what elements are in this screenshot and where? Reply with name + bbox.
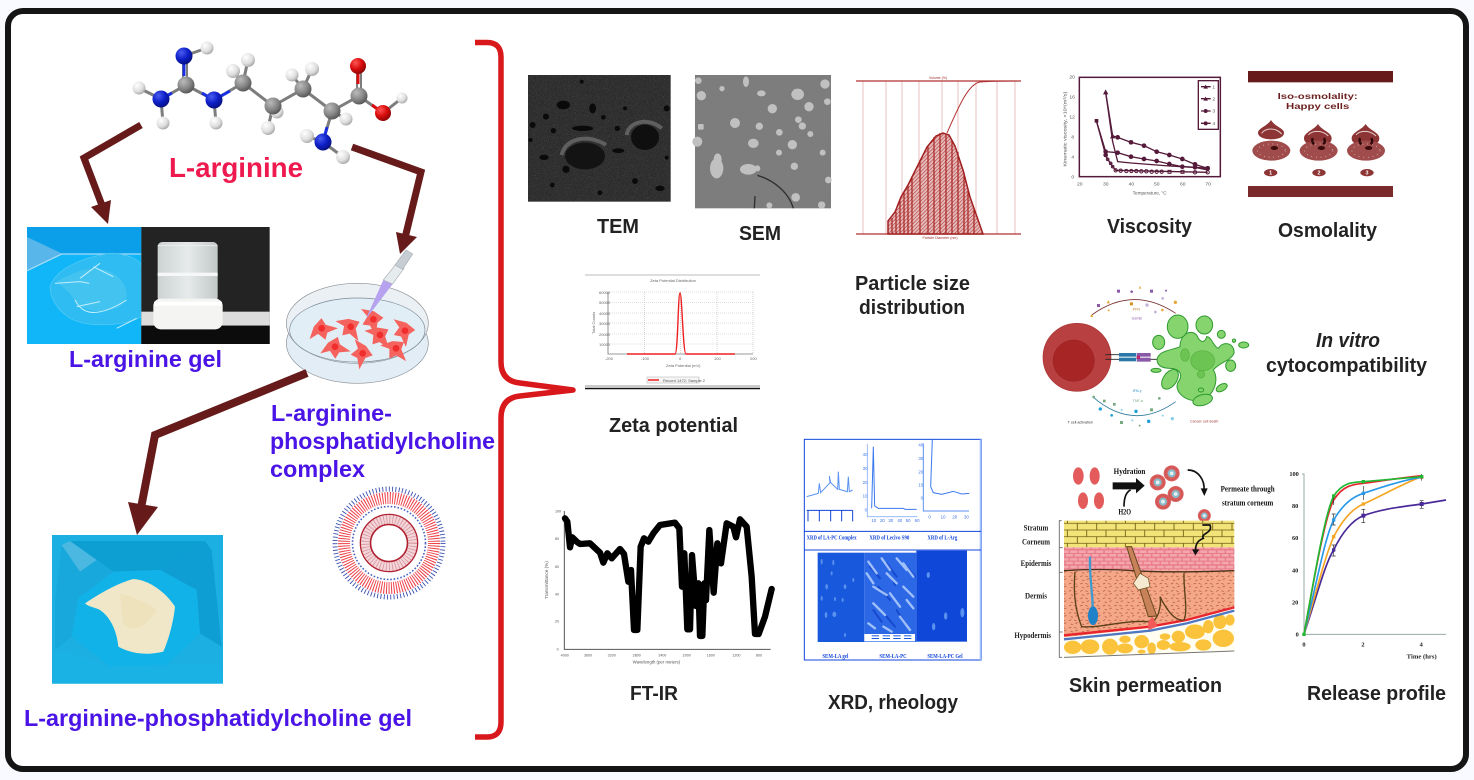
- panel: XRD and rheology blue composite: 0: [921, 495, 924, 500]
- panel: XRD and rheology blue composite: 60: [915, 518, 920, 523]
- label: XRD, rheology: XRD, rheology: [828, 692, 959, 714]
- icon: liposome: [335, 489, 443, 597]
- chart: release profile: Time (hrs): [1407, 653, 1437, 660]
- arrow: dish to complex gel: [128, 373, 307, 535]
- chart: FT-IR spectrum: 2800: [633, 654, 641, 658]
- chart: zeta potential: 10000: [599, 342, 611, 347]
- chart: viscosity: 1: [1212, 84, 1215, 90]
- chart: viscosity: Temperature, °C: [1133, 191, 1167, 196]
- panel: XRD and rheology blue composite: 0: [865, 507, 868, 512]
- chart: zeta potential: -200: [605, 356, 614, 361]
- chart: viscosity: 16: [1069, 95, 1075, 101]
- chart: release profile: 40: [1292, 567, 1298, 574]
- chart: FT-IR spectrum: 80: [555, 537, 559, 541]
- chart: viscosity: 4: [1212, 121, 1215, 127]
- chart: viscosity: 20: [1069, 75, 1075, 81]
- panel: XRD and rheology blue composite: 20: [863, 480, 868, 485]
- chart: viscosity: 60: [1180, 181, 1186, 187]
- chart: release profile: 4: [1420, 642, 1424, 649]
- illustration: in vitro cytocompatibility: Cancer cell death: [1190, 420, 1218, 424]
- panel: XRD and rheology blue composite: 10: [871, 518, 877, 523]
- illustration: skin permeation: Permeate through: [1221, 483, 1275, 493]
- panel: XRD and rheology blue composite: 10: [863, 493, 868, 498]
- illustration: skin permeation: Dermis: [1025, 590, 1048, 600]
- arrow: molecule to dish: [352, 147, 421, 254]
- chart: zeta potential: 20000: [599, 332, 611, 337]
- chart: viscosity: 30: [1103, 181, 1109, 187]
- panel: XRD and rheology blue composite: 10: [918, 483, 924, 488]
- label: In vitro cytocompatibility: [1266, 330, 1428, 377]
- image: osmolality panel: 2: [1318, 171, 1321, 177]
- label: FT-IR: FT-IR: [630, 683, 679, 705]
- chart: FT-IR spectrum: 1200: [732, 654, 740, 658]
- illustration: skin permeation: Hypodermis: [1014, 630, 1052, 640]
- chart: zeta potential: -100: [641, 356, 650, 361]
- illustration: skin permeation: Epidermis: [1021, 558, 1052, 568]
- chart: viscosity: 8: [1071, 134, 1074, 140]
- illustration: skin permeation: stratum corneum: [1222, 497, 1274, 507]
- panel: XRD and rheology blue composite: 30: [888, 518, 894, 523]
- chart: FT-IR spectrum: 60: [555, 565, 559, 569]
- illustration: in vitro cytocompatibility: IFN-γ: [1133, 389, 1142, 393]
- chart: zeta potential: 40000: [599, 311, 611, 316]
- chart: viscosity: 12: [1069, 115, 1075, 121]
- label: SEM: SEM: [739, 223, 781, 245]
- image: osmolality panel: [1248, 71, 1393, 197]
- chart: release profile: 80: [1292, 503, 1298, 510]
- panel: XRD and rheology blue composite: XRD of Lecivo S90: [869, 534, 909, 541]
- label: TEM: TEM: [597, 216, 639, 238]
- illustration: skin permeation: Hydration: [1114, 466, 1145, 476]
- panel: XRD and rheology blue composite: 40: [863, 452, 868, 457]
- image: TEM micrograph: [528, 75, 671, 202]
- label: Osmolality: Osmolality: [1278, 220, 1378, 242]
- bracket: red brace pointing to characterization: [475, 42, 573, 737]
- chart: release profile: 0: [1302, 642, 1306, 649]
- label: In vitro cytocompatibility: In vitro: [1316, 330, 1380, 352]
- chart: viscosity: 3: [1212, 109, 1215, 115]
- photo: L-arginine gel: [27, 227, 270, 344]
- image: osmolality panel: 1: [1269, 171, 1272, 177]
- chart: zeta potential: Zeta Potential Distribution: [650, 278, 696, 283]
- panel: XRD and rheology blue composite: 40: [918, 443, 924, 448]
- chart: zeta potential: 200: [750, 356, 757, 361]
- panel: XRD and rheology blue composite: XRD of LA-PC Complex: [807, 534, 857, 541]
- label: Viscosity: Viscosity: [1107, 216, 1193, 238]
- label: In vitro cytocompatibility: cytocompatibility: [1266, 355, 1428, 377]
- chart: particle size distribution: Particle Diameter (nm): [922, 236, 958, 240]
- chart: FT-IR spectrum: 0: [557, 648, 559, 652]
- panel: XRD and rheology blue composite: 30: [964, 515, 969, 520]
- chart: FT-IR spectrum: Transmittance (%): [544, 561, 549, 599]
- label: L-arginine-phosphatidylcholine gel: L-arginine-phosphatidylcholine gel: [24, 705, 412, 731]
- panel: XRD and rheology blue composite: XRD of L-Arg: [927, 534, 958, 541]
- illustration: in vitro cytocompatibility: PFN: [1133, 308, 1140, 312]
- chart: viscosity: 2: [1212, 96, 1215, 102]
- illustration: in vitro cytocompatibility: T cell activation: [1068, 421, 1093, 425]
- chart: viscosity: 70: [1205, 181, 1211, 187]
- illustration: in vitro cytocompatibility: TNF-α: [1133, 399, 1144, 403]
- panel: XRD and rheology blue composite: SEM-LA gel: [822, 653, 849, 660]
- label: L-arginine-phosphatidylcholine complex: phosphatidylcholine: [270, 428, 495, 454]
- label: Release profile: Release profile: [1307, 683, 1446, 705]
- chart: zeta potential: Zeta Potential (mV): [666, 363, 701, 368]
- chart: zeta potential: 0: [679, 356, 682, 361]
- chart: FT-IR spectrum: [544, 510, 772, 664]
- title: L-arginine: L-arginine: [169, 152, 303, 183]
- chart: viscosity: 0: [1071, 174, 1074, 180]
- illustration: skin permeation: Stratum: [1024, 523, 1049, 533]
- image: SEM micrograph: [692, 75, 832, 209]
- chart: particle size distribution: [856, 76, 1021, 240]
- label: Zeta potential: Zeta potential: [609, 415, 738, 437]
- illustration: skin permeation: Corneum: [1022, 537, 1051, 547]
- chart: zeta potential: 30000: [599, 321, 611, 326]
- label: Particle size distribution: distribution: [859, 297, 965, 319]
- chart: release profile: 0: [1296, 632, 1299, 639]
- photo: L-arginine-phosphatidylcholine gel: [52, 535, 223, 684]
- chart: zeta potential: Record 1472: Sample 2: [663, 378, 706, 383]
- panel: XRD and rheology blue composite: [804, 439, 981, 660]
- label: L-arginine gel: L-arginine gel: [69, 346, 222, 372]
- label: Particle size distribution: Particle size: [855, 273, 970, 295]
- chart: FT-IR spectrum: 4000: [561, 654, 569, 658]
- chart: release profile: 100: [1289, 471, 1299, 478]
- chart: FT-IR spectrum: 1600: [707, 654, 715, 658]
- image: osmolality panel: 3: [1366, 171, 1369, 177]
- arrow: molecule to L-arginine gel: [84, 125, 141, 224]
- illustration: skin permeation: [1014, 465, 1275, 657]
- image: osmolality panel: Happy cells: [1286, 102, 1350, 111]
- chart: viscosity: [1063, 75, 1220, 196]
- chart: viscosity: 40: [1129, 181, 1134, 187]
- label: L-arginine-phosphatidylcholine complex: complex: [270, 456, 365, 482]
- panel: XRD and rheology blue composite: 30: [863, 466, 868, 471]
- chart: release profile: 20: [1292, 600, 1298, 607]
- chart: FT-IR spectrum: 100: [555, 510, 561, 514]
- panel: XRD and rheology blue composite: 0: [928, 515, 931, 520]
- panel: XRD and rheology blue composite: 20: [880, 518, 885, 523]
- chart: FT-IR spectrum: 3600: [584, 654, 592, 658]
- panel: XRD and rheology blue composite: 20: [952, 515, 958, 520]
- label: Particle size distribution: [855, 273, 970, 319]
- chart: zeta potential: Total Counts: [591, 312, 596, 334]
- chart: release profile: 60: [1292, 535, 1298, 542]
- chart: release profile: [1289, 471, 1446, 660]
- illustration: in vitro cytocompatibility: [1043, 286, 1249, 427]
- chart: FT-IR spectrum: 800: [756, 654, 762, 658]
- chart: FT-IR spectrum: 40: [555, 592, 559, 596]
- chart: FT-IR spectrum: Wavelength (per meters): [633, 659, 681, 664]
- panel: XRD and rheology blue composite: SEM-LA-PC Gel: [927, 653, 963, 660]
- panel: XRD and rheology blue composite: 20: [918, 469, 924, 474]
- chart: particle size distribution: Volume (%): [929, 76, 947, 80]
- panel: XRD and rheology blue composite: SEM-LA-PC: [879, 653, 907, 660]
- chart: zeta potential: [585, 275, 760, 388]
- chart: FT-IR spectrum: 20: [555, 620, 559, 624]
- panel: XRD and rheology blue composite: 10: [941, 515, 946, 520]
- illustration: in vitro cytocompatibility: GzmB: [1132, 317, 1142, 321]
- molecule: L-arginine ball and stick: [132, 42, 408, 164]
- panel: XRD and rheology blue composite: 40: [897, 518, 903, 523]
- label: Skin permeation: Skin permeation: [1069, 675, 1222, 697]
- panel: XRD and rheology blue composite: 50: [906, 518, 911, 523]
- icon: petri dish with cells and pipette: [286, 250, 428, 383]
- chart: zeta potential: 50000: [599, 300, 611, 305]
- chart: FT-IR spectrum: 3200: [608, 654, 616, 658]
- label: L-arginine-phosphatidylcholine complex: L-arginine-: [271, 400, 392, 426]
- chart: viscosity: Kinematic viscosity, ×10⁶(m²/s): [1063, 91, 1069, 167]
- chart: viscosity: 20: [1077, 181, 1083, 187]
- illustration: skin permeation: H2O: [1118, 507, 1131, 517]
- chart: zeta potential: 60000: [599, 290, 611, 295]
- chart: release profile: 2: [1361, 642, 1365, 649]
- panel: XRD and rheology blue composite: 30: [918, 456, 924, 461]
- chart: zeta potential: 100: [714, 356, 721, 361]
- chart: FT-IR spectrum: 2400: [658, 654, 666, 658]
- chart: FT-IR spectrum: 2000: [683, 654, 691, 658]
- chart: viscosity: 4: [1071, 154, 1074, 160]
- label: L-arginine-phosphatidylcholine complex: [270, 400, 495, 482]
- image: osmolality panel: Iso-osmolality:: [1278, 92, 1358, 101]
- chart: viscosity: 50: [1154, 181, 1160, 187]
